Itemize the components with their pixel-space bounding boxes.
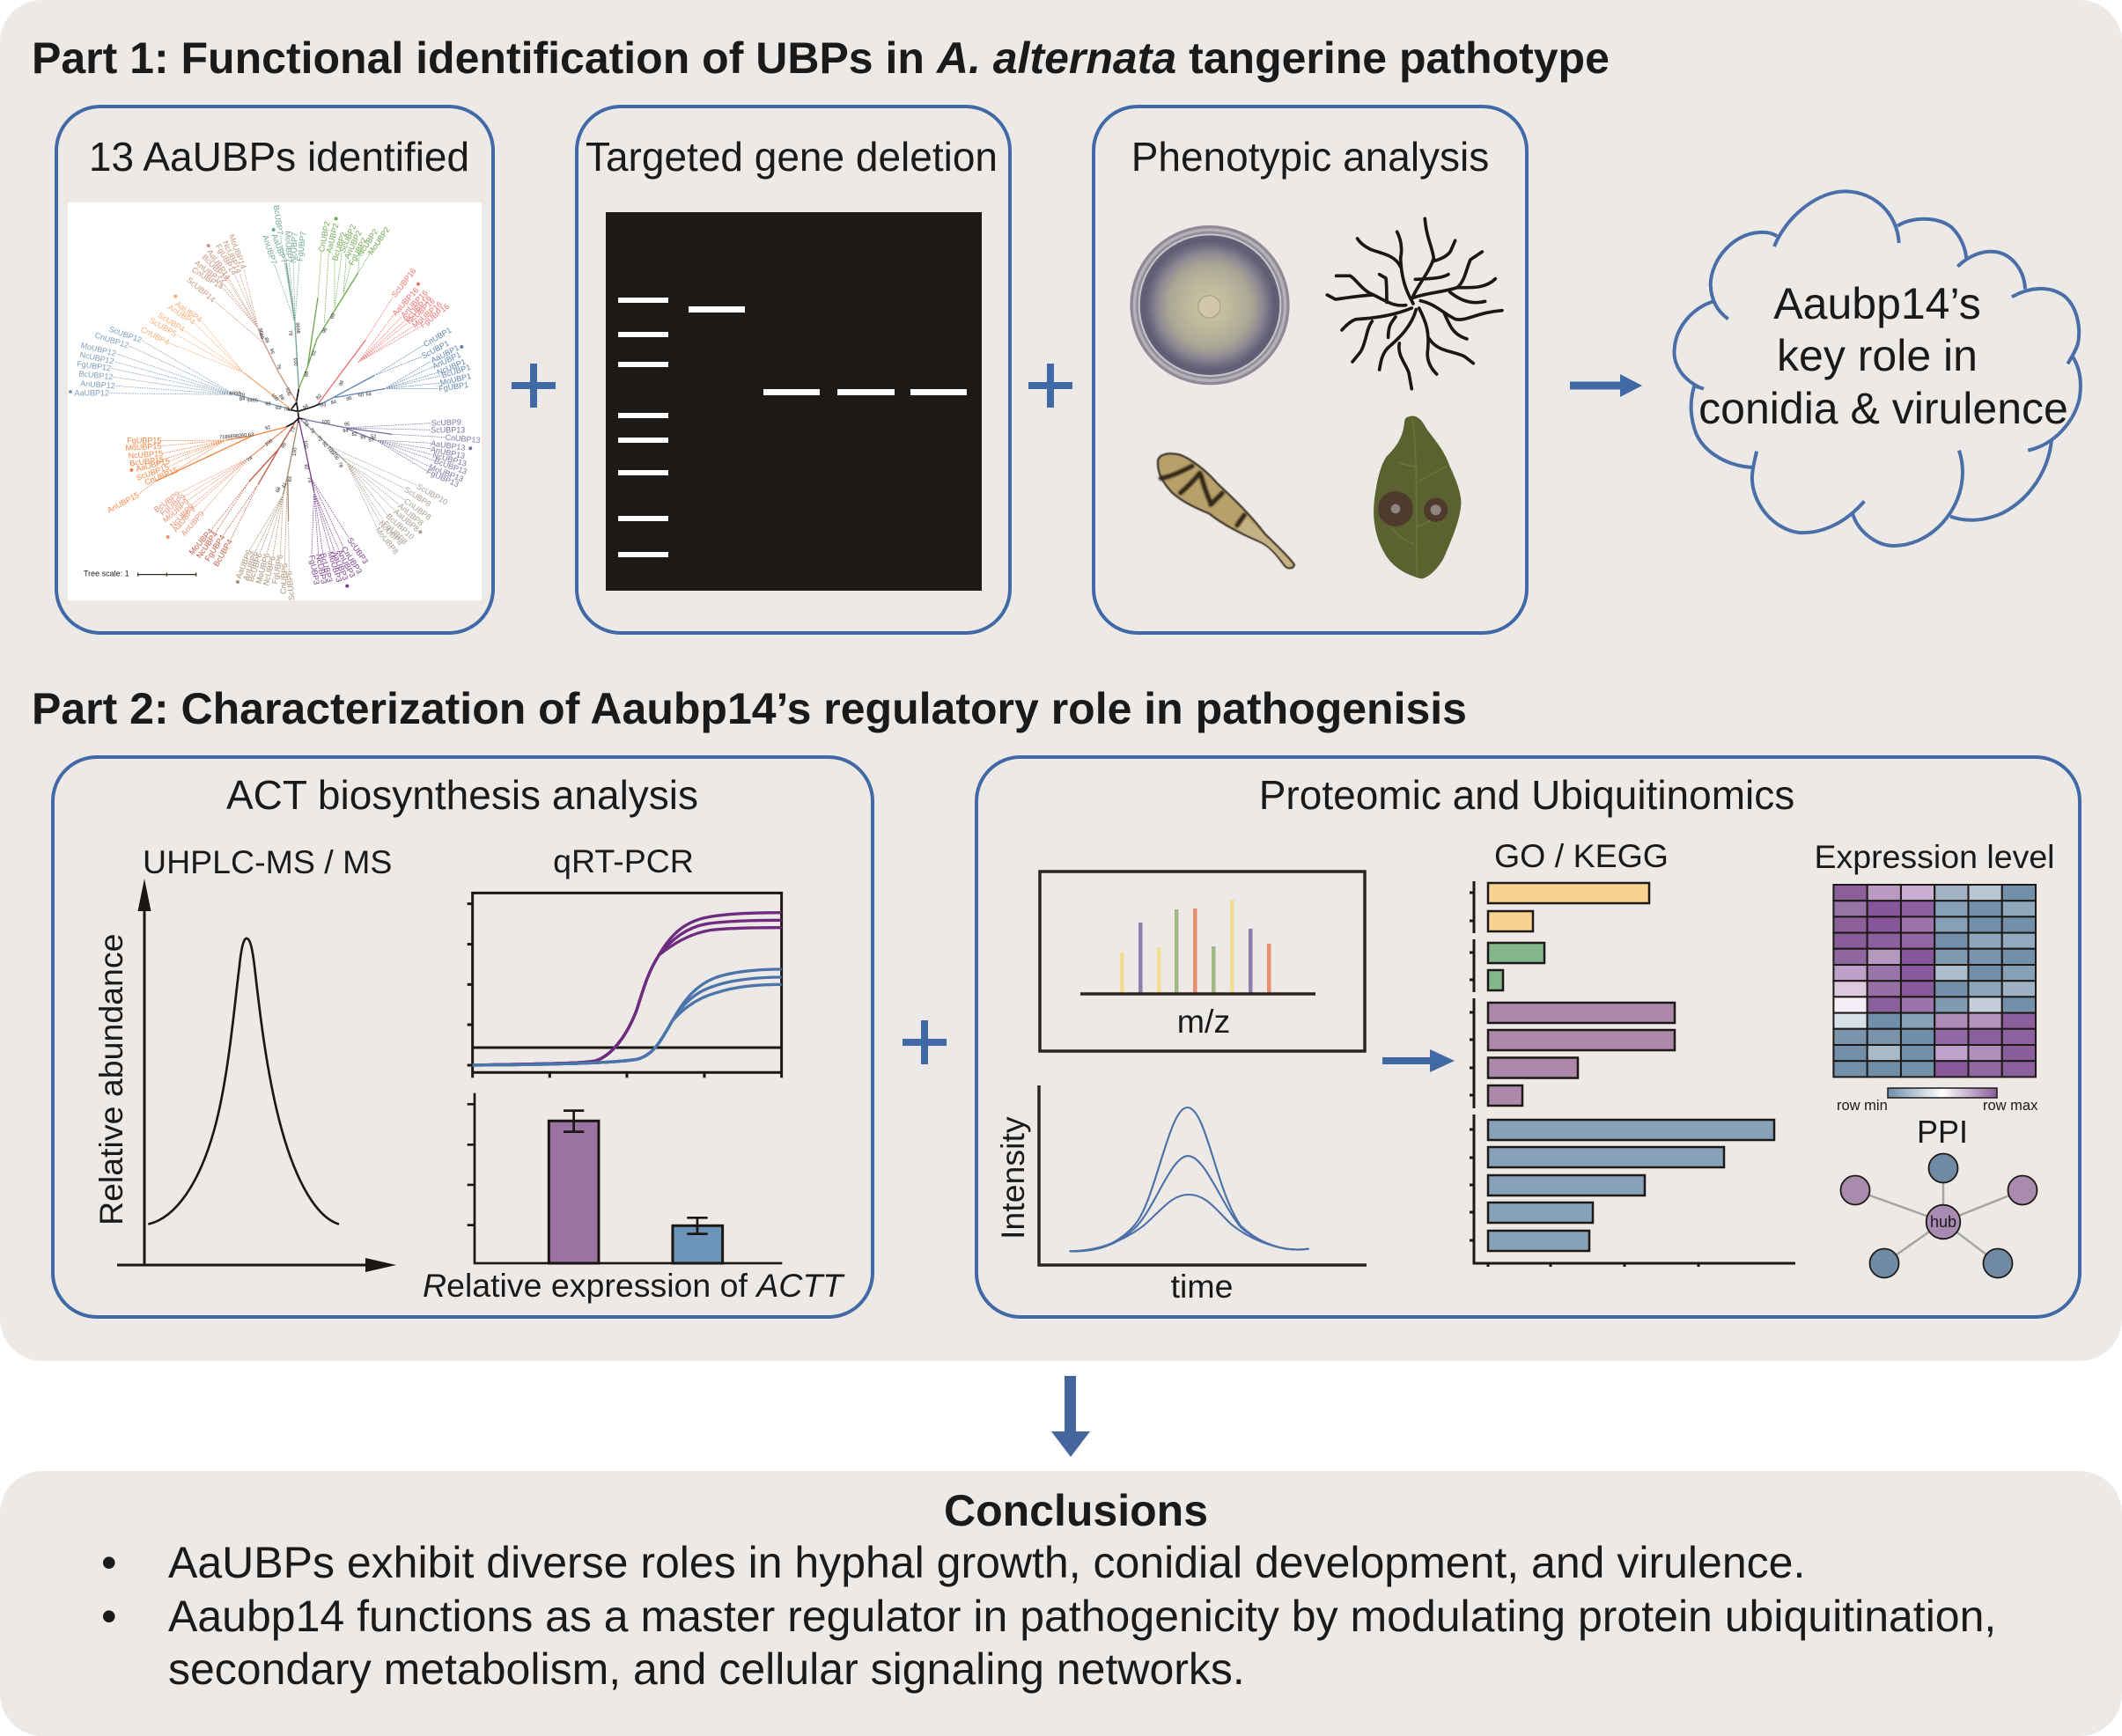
panel: targeted gene deletion: Targeted gene deletion	[586, 134, 998, 180]
phylogenetic tree: AnUBP6	[241, 550, 260, 582]
phylogenetic tree: CnUBP2	[317, 221, 332, 253]
phylogenetic tree: AnUBP16	[399, 288, 430, 320]
panel: ACT biosynthesis analysis: Relative expression of ACTT	[423, 1267, 845, 1304]
chart: expression heatmap: row min	[1837, 1098, 1888, 1114]
phylogenetic tree: 100	[269, 393, 279, 402]
phylogenetic tree: ScUBP12	[107, 325, 143, 344]
phylogenetic tree: 100	[292, 357, 298, 366]
phylogenetic tree: ScUBP14	[185, 276, 217, 304]
phylogenetic tree: MoUBP3	[326, 550, 343, 583]
phylogenetic tree: MoUBP14	[227, 233, 247, 270]
phylogenetic tree: AnUBP4	[166, 303, 196, 327]
chart: expression heatmap	[1814, 838, 2055, 1114]
phylogenetic tree: FgUBP6	[270, 554, 284, 585]
phylogenetic tree: 98	[265, 401, 270, 407]
phylogenetic tree: 82	[303, 464, 309, 470]
phylogenetic tree: 96	[257, 327, 263, 335]
phylogenetic tree: BcUBP13	[433, 457, 468, 476]
phylogenetic tree: 98	[338, 379, 345, 387]
arrow: to enrichment chart	[1382, 1049, 1455, 1072]
phylogenetic tree: AaUBP4	[173, 299, 203, 324]
phylogenetic tree: 99	[360, 435, 365, 440]
plus sign	[512, 364, 556, 408]
phylogenetic tree: BcUBP9	[152, 489, 181, 514]
phylogenetic tree: 55	[302, 420, 309, 428]
phylogenetic tree: 94	[302, 403, 310, 411]
phylogenetic tree: CnUBP4	[139, 325, 171, 347]
chart: GO / KEGG bars	[1470, 837, 1795, 1267]
phylogenetic tree: NcUBP3	[314, 553, 328, 585]
phylogenetic tree: 52	[311, 349, 318, 357]
phylogenetic tree: ScUBP15	[135, 462, 170, 482]
phylogenetic tree: BcUBP1	[440, 363, 472, 379]
phylogenetic tree: ScUBP8	[402, 485, 432, 509]
phylogenetic tree: NcUBP16	[405, 297, 437, 326]
phylogenetic tree: FgUBP3	[307, 555, 321, 585]
phylogenetic tree: FgUBP8	[381, 519, 409, 546]
panel: proteomic and ubiquitinomics	[976, 757, 2080, 1317]
gel image	[606, 212, 982, 591]
phylogenetic tree: FgUBP4	[203, 533, 227, 563]
phylogenetic tree: AnUBP12	[80, 379, 115, 390]
phylogenetic tree: MoUBP16	[410, 299, 444, 329]
phylogenetic tree: 78	[336, 461, 343, 468]
phylogenetic tree: 60	[321, 441, 328, 448]
panel: ACT biosynthesis analysis: ACT biosynthesis analysis	[226, 772, 698, 818]
chart: mass spectrum: m/z	[1177, 1003, 1230, 1040]
phylogenetic tree: 60	[358, 393, 364, 398]
phylogenetic tree: BcUBP10	[385, 511, 416, 541]
phylogenetic tree: BcUBP15	[129, 455, 165, 467]
phylogenetic tree: BcUBP16	[402, 293, 432, 324]
chart: UHPLC-MS/MS peak	[92, 843, 396, 1272]
chart: PPI network	[1840, 1114, 2037, 1278]
phylogenetic tree: ScUBP9	[431, 417, 461, 428]
phylogenetic tree: FgUBP7	[295, 231, 308, 261]
chart: qRT-PCR amplification curves	[468, 893, 782, 1078]
chart: UHPLC-MS/MS peak: Relative abundance	[92, 933, 129, 1225]
phylogenetic tree: 6998	[230, 391, 241, 396]
text block: conclusion bullets: AaUBPs exhibit diverse roles in hyphal growth, conidial development, and virulence.	[168, 1538, 1805, 1587]
phylogenetic tree: AnUBP1	[431, 350, 462, 371]
phylogenetic tree: NcUBP13	[431, 451, 468, 468]
phylogenetic tree: NcUBP7	[289, 232, 299, 262]
phylogenetic tree: ScUBP3	[346, 536, 370, 565]
phylogenetic tree: MoUBP1	[439, 371, 472, 387]
chart: mass spectrum	[1040, 872, 1365, 1051]
arrow: to conclusions	[1051, 1376, 1090, 1457]
phylogenetic tree: BcUBP14	[201, 253, 231, 283]
phylogenetic tree: CnUBP6	[278, 563, 289, 594]
phylogenetic tree: BcUBP12	[78, 369, 114, 381]
phylogenetic tree: 57	[368, 438, 374, 444]
phylogenetic tree: FgUBP14	[214, 242, 239, 276]
panel: phenotypic analysis: Phenotypic analysis	[1131, 134, 1489, 180]
heading: part 2: Part 2: Characterization of Aaubp14’s regulatory role in pathogenisis	[32, 684, 1467, 733]
chart: UHPLC-MS/MS peak: UHPLC-MS / MS	[143, 843, 392, 880]
phylogenetic tree: MoUBP13	[428, 462, 465, 483]
phylogenetic tree: 82	[315, 394, 323, 401]
phylogenetic tree: CnUBP3	[340, 545, 364, 576]
phylogenetic tree: 92	[264, 425, 271, 432]
phylogenetic tree: CnUBP8	[402, 497, 432, 521]
phylogenetic tree: NcUBP6	[262, 555, 277, 586]
phylogenetic tree: 82	[351, 432, 357, 438]
phylogenetic tree: 100	[292, 447, 298, 456]
text block: conclusion bullets: •	[101, 1538, 117, 1587]
phylogenetic tree: 76	[275, 364, 282, 370]
phylogenetic tree: 73	[291, 426, 297, 433]
phylogenetic tree: 100	[302, 440, 308, 449]
phylogenetic tree: FgUBP1	[438, 380, 469, 394]
phylogenetic tree: MoUBP8	[373, 526, 400, 555]
phylogenetic tree: FgUBP13	[425, 467, 461, 489]
phylogenetic tree: Tree scale: 1	[84, 570, 129, 578]
phylogenetic tree: MoUBP2	[366, 225, 392, 256]
phylogenetic tree: BcUBP6	[247, 552, 264, 583]
plus sign	[1028, 364, 1072, 408]
text block: conclusion bullets: Aaubp14 functions as a master regulator in pathogenicity by modulating protein ubiquitination,	[168, 1592, 1996, 1641]
phylogenetic tree: ScUBP10	[415, 482, 449, 506]
phylogenetic tree: 96	[321, 327, 328, 335]
phylogenetic tree: AnUBP14	[193, 258, 225, 287]
phylogenetic tree: 64	[365, 393, 372, 398]
phylogenetic tree: 74	[306, 477, 312, 483]
phylogenetic tree: 78	[287, 330, 293, 336]
phylogenetic tree: NcUBP12	[79, 350, 114, 366]
phylogenetic tree: 83	[321, 403, 326, 408]
phylogenetic tree: AnUBP3	[335, 548, 357, 579]
phylogenetic tree: 41	[281, 482, 288, 489]
phylogenetic tree: MoUBP15	[125, 442, 162, 452]
phylogenetic tree: AnUBP2	[343, 229, 364, 261]
phylogenetic tree: 84	[330, 400, 337, 406]
phylogenetic tree: 64	[288, 476, 293, 482]
panel: conclusions background	[0, 1471, 2122, 1736]
chart: intensity over time	[994, 1085, 1367, 1305]
arrow: to conclusion cloud	[1570, 374, 1642, 397]
heading: part 1: Part 1: Functional identification of UBPs in A. alternata tangerine pathotype	[32, 33, 1610, 83]
phylogenetic tree: BcUBP4	[211, 538, 234, 568]
phylogenetic tree: FgUBP2	[347, 236, 369, 267]
chart: relative expression bars	[468, 1093, 782, 1263]
phylogenetic tree: AaUBP15	[135, 456, 171, 474]
phylogenetic tree: AaUBP1	[430, 343, 461, 364]
phylogenetic tree: FgUBP12	[77, 359, 112, 372]
icon: petri dish	[1130, 225, 1290, 385]
plus sign	[903, 1020, 947, 1064]
panel: ACT biosynthesis analysis: qRT-PCR	[553, 842, 694, 879]
panel: targeted gene deletion	[577, 107, 1010, 633]
phylogenetic tree: 74	[247, 456, 254, 463]
phylogenetic tree: 95	[344, 423, 350, 428]
phylogenetic tree: CnUBP15	[144, 466, 180, 487]
phylogenetic tree: AaUBP9	[171, 504, 197, 533]
callout: cloud with key role	[1674, 191, 2081, 546]
chart: GO / KEGG bars: GO / KEGG	[1494, 837, 1669, 874]
phylogenetic tree: BcUBP7	[272, 204, 284, 235]
phylogenetic tree: 68	[276, 487, 283, 494]
panel: proteomic and ubiquitinomics: Proteomic and Ubiquitinomics	[1259, 772, 1794, 818]
phylogenetic tree: NcUBP2	[356, 227, 379, 258]
callout: cloud with key role: key role in	[1777, 331, 1978, 380]
phylogenetic tree: FgUBP9	[158, 492, 188, 518]
phylogenetic tree: NcUBP15	[128, 449, 163, 460]
callout: cloud with key role: conidia & virulence	[1698, 384, 2068, 433]
phylogenetic tree: AaUBP14	[205, 247, 232, 282]
phylogenetic tree: 86	[280, 442, 288, 449]
phylogenetic tree: CnUBP1	[422, 326, 453, 349]
phylogenetic tree: NcUBP4	[195, 530, 219, 560]
phylogenetic tree: 100	[321, 420, 330, 425]
phylogenetic tree: NcUBP1	[436, 357, 467, 377]
phylogenetic tree: AaUBP6	[234, 548, 254, 580]
heading: conclusions: Conclusions	[944, 1486, 1208, 1535]
phylogenetic tree: 84	[239, 397, 245, 402]
chart: expression heatmap: Expression level	[1814, 838, 2055, 875]
chart: intensity over time: time	[1171, 1268, 1233, 1305]
phylogenetic tree: AnUBP8	[396, 501, 425, 527]
text block: conclusion bullets	[101, 1538, 1996, 1694]
phylogenetic tree: MoUBP9	[161, 497, 191, 525]
icon: infected leaf	[1374, 416, 1461, 578]
phylogenetic tree: 96	[346, 396, 352, 402]
phylogenetic tree	[69, 204, 481, 601]
phylogenetic tree: 89	[263, 337, 269, 343]
phylogenetic tree: AaUBP12	[75, 389, 109, 398]
chart: PPI network: PPI	[1917, 1114, 1968, 1150]
panel: 13 AaUBPs identified	[56, 107, 493, 633]
phylogenetic tree: NcUBP9	[168, 502, 195, 530]
phylogenetic tree: MoUBP12	[80, 341, 117, 357]
phylogenetic tree: 89	[258, 333, 264, 340]
phylogenetic tree: ScUBP1	[420, 339, 451, 360]
text block: conclusion bullets: secondary metabolism, and cellular signaling networks.	[168, 1644, 1245, 1694]
phylogenetic tree: AaUBP16	[391, 286, 420, 318]
phylogenetic tree: AaUBP7	[270, 232, 289, 264]
panel: 13 AaUBPs identified: 13 AaUBPs identified	[89, 134, 469, 180]
phylogenetic tree: NcUBP8	[377, 519, 405, 547]
icon: hyphae	[1327, 218, 1502, 389]
phylogenetic tree: 89	[277, 394, 284, 401]
icon: conidium	[1158, 453, 1294, 568]
chart: PPI network: hub	[1930, 1213, 1956, 1231]
phylogenetic tree: 65	[330, 313, 337, 320]
phylogenetic tree: NcUBP14	[221, 239, 243, 275]
phylogenetic tree: ScUBP16	[390, 267, 418, 299]
phylogenetic tree: AnUBP13	[430, 445, 466, 460]
text block: conclusion bullets: •	[101, 1592, 117, 1641]
phylogenetic tree: ScUBP4	[157, 311, 187, 334]
phylogenetic tree: CnUBP13	[445, 433, 481, 445]
phylogenetic tree: 100	[326, 445, 335, 455]
phylogenetic tree: 95	[269, 348, 275, 355]
phylogenetic tree: BcUBP2	[330, 231, 348, 262]
phylogenetic tree: AnUBP7	[261, 234, 278, 266]
phylogenetic tree: 100	[331, 452, 340, 461]
phylogenetic tree: 73	[308, 427, 315, 435]
phylogenetic tree: 100	[284, 387, 291, 396]
phylogenetic tree: 7189898260 63	[219, 432, 254, 441]
panel: phenotypic analysis	[1094, 107, 1527, 633]
phylogenetic tree: ScUBP13	[431, 425, 465, 434]
phylogenetic tree: AaUBP2	[324, 223, 340, 254]
phylogenetic tree: AnUBP15	[106, 490, 141, 515]
phylogenetic tree: ScUBP2	[338, 223, 357, 254]
phylogenetic tree: AaUBP3	[330, 550, 350, 581]
chart: intensity over time: Intensity	[994, 1116, 1031, 1239]
phylogenetic tree: 100	[264, 438, 274, 447]
callout: cloud with key role: Aaubp14’s	[1773, 279, 1981, 328]
phylogenetic tree: AaUBP13	[431, 438, 466, 452]
phylogenetic tree: AnUBP9	[180, 509, 206, 538]
phylogenetic tree: FgUBP15	[127, 437, 161, 445]
chart: expression heatmap: row max	[1983, 1098, 2038, 1114]
phylogenetic tree: 88	[304, 371, 310, 378]
panel: ACT biosynthesis analysis	[53, 757, 873, 1317]
phylogenetic tree: 52	[371, 435, 376, 440]
panel: top background (parts 1 and 2)	[0, 0, 2122, 1361]
phylogenetic tree: 78	[239, 393, 245, 398]
phylogenetic tree: 9465	[247, 398, 258, 403]
phylogenetic tree: 70	[284, 407, 289, 412]
phylogenetic tree: 9698	[294, 322, 300, 334]
phylogenetic tree: BcUBP3	[319, 552, 335, 583]
phylogenetic tree: CnUBP14	[190, 265, 225, 291]
phylogenetic tree: MoUBP6	[254, 552, 271, 585]
phylogenetic tree: 69	[276, 406, 281, 411]
phylogenetic tree: AaUBP8	[392, 507, 421, 533]
phylogenetic tree: MoUBP4	[188, 526, 215, 556]
phylogenetic tree: FgUBP16	[418, 302, 451, 330]
phylogenetic tree: MoUBP7	[284, 231, 293, 262]
phylogenetic tree: ScUBP6	[284, 570, 296, 601]
phylogenetic tree: 94	[343, 429, 348, 434]
phylogenetic tree: 70	[315, 435, 322, 443]
phylogenetic tree: CnUBP12	[93, 331, 130, 349]
phylogenetic tree: ScUBP5	[148, 316, 178, 338]
